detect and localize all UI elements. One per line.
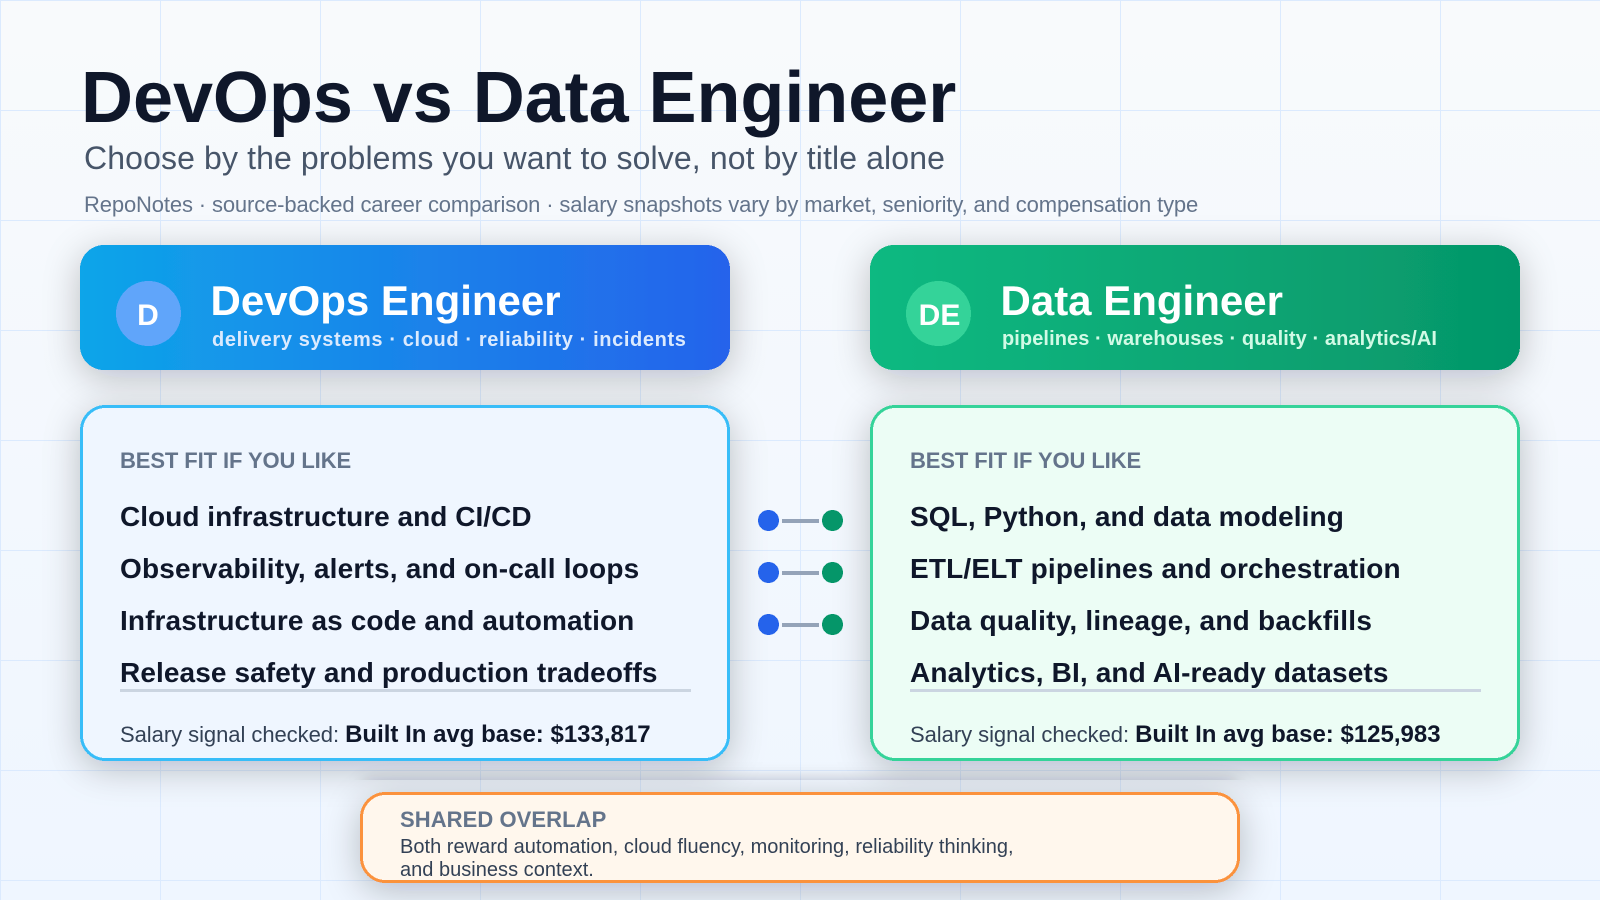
DevOps heading: DevOps Engineer <box>210 277 561 324</box>
icon: DE badge <box>906 281 971 346</box>
panel: Data Engineer best fit <box>851 394 1539 788</box>
list item: Infrastructure as code and automation <box>120 605 634 636</box>
title: DevOps vs Data Engineer <box>81 58 956 138</box>
list item: SQL, Python, and data modeling <box>910 501 1344 532</box>
Data Engineer tags: pipelines · warehouses · quality · analytics/AI <box>1002 328 1437 350</box>
panel: DevOps header <box>61 234 749 397</box>
connector row 3 <box>758 614 843 635</box>
source note: RepoNotes · source-backed career comparison · salary snapshots vary by market, seniority, and compensation type <box>84 192 1198 217</box>
salary signal: Salary signal checked: Built In avg base: $125,983 <box>910 721 1441 748</box>
callout body: Both reward automation, cloud fluency, monitoring, reliability thinking, <box>400 836 1014 858</box>
list item: Cloud infrastructure and CI/CD <box>120 501 532 532</box>
subtitle: Choose by the problems you want to solve, not by title alone <box>84 140 945 176</box>
list item: ETL/ELT pipelines and orchestration <box>910 553 1401 584</box>
list item: Observability, alerts, and on-call loops <box>120 553 639 584</box>
icon: D badge: D <box>137 299 159 332</box>
callout heading: SHARED OVERLAP <box>400 807 606 832</box>
panel: DevOps best fit <box>61 394 749 788</box>
list item: Data quality, lineage, and backfills <box>910 605 1372 636</box>
callout: shared overlap <box>342 781 1258 900</box>
kicker: BEST FIT IF YOU LIKE <box>910 448 1141 473</box>
connector row 2 <box>758 562 843 583</box>
kicker: BEST FIT IF YOU LIKE <box>120 448 351 473</box>
connector row 1 <box>758 510 843 531</box>
DevOps tags: delivery systems · cloud · reliability · incidents <box>212 329 686 351</box>
panel: Data Engineer header <box>851 234 1539 397</box>
list item: Analytics, BI, and AI-ready datasets <box>910 657 1389 688</box>
callout body <box>400 836 1014 881</box>
icon: D badge <box>116 281 181 346</box>
callout body: and business context. <box>400 859 594 881</box>
list item: Release safety and production tradeoffs <box>120 657 658 688</box>
icon: DE badge: DE <box>919 299 960 332</box>
Data Engineer heading: Data Engineer <box>1000 277 1283 324</box>
salary signal: Salary signal checked: Built In avg base: $133,817 <box>120 721 651 748</box>
